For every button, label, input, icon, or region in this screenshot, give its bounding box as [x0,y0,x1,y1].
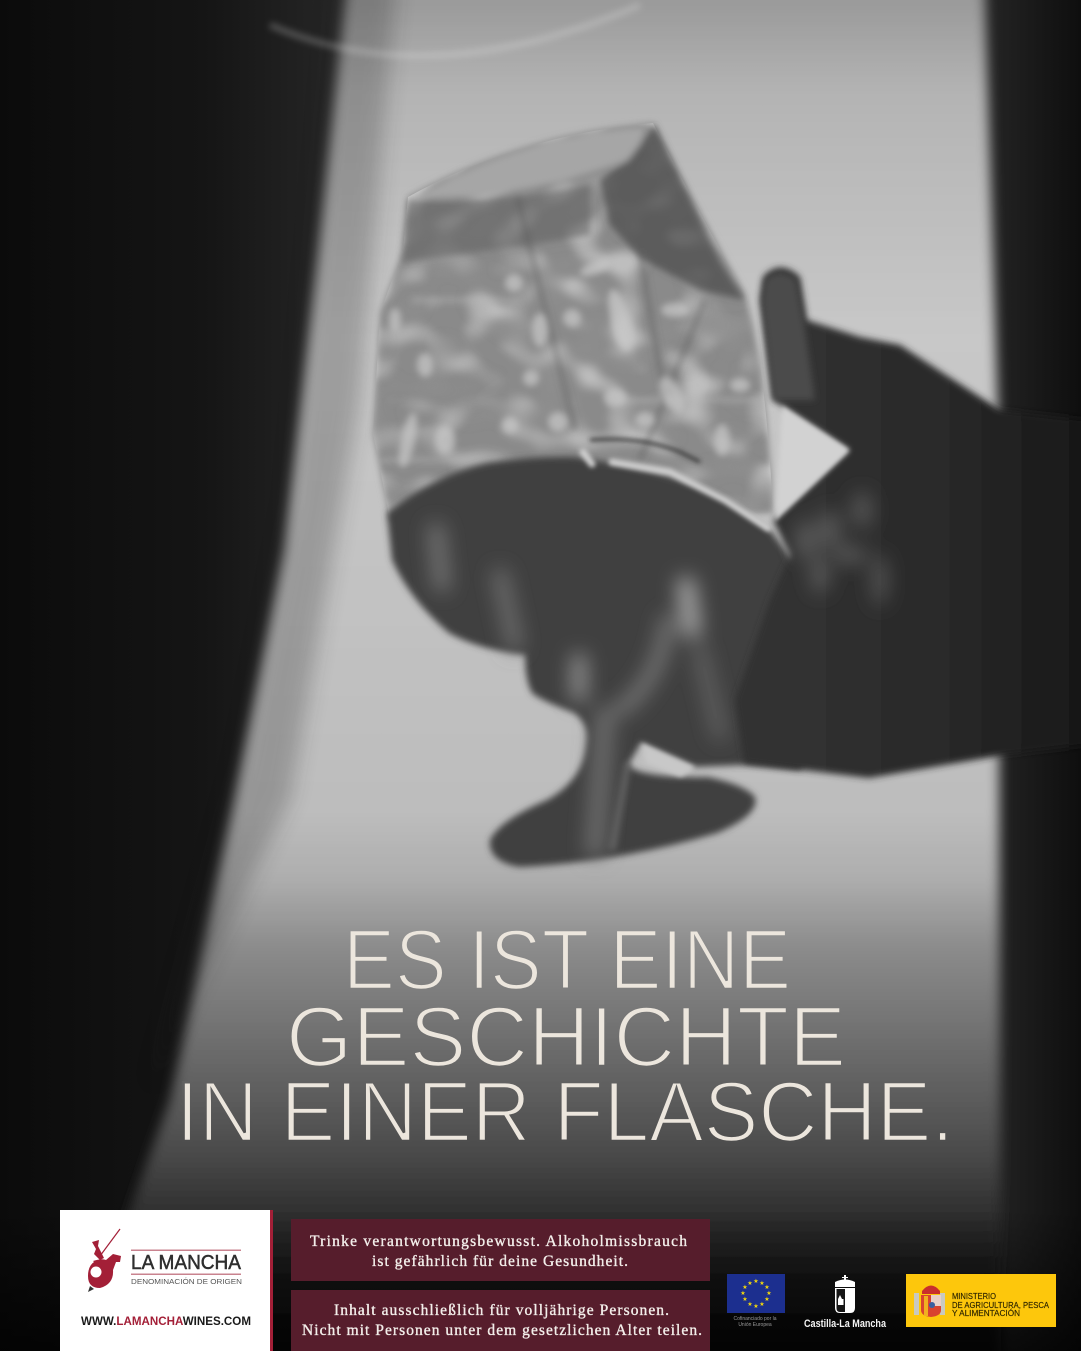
logo: European Union: ★ [747,1280,753,1287]
logo: European Union: ★ [753,1303,759,1310]
rim band [415,127,645,198]
wine glass shadow [370,120,804,872]
mottled shadow of fingers [797,492,886,606]
bottom floor shade [0,1210,1081,1351]
logo: European Union: ★ [764,1296,770,1303]
logo: European Union: ★ [740,1290,746,1297]
logo: Castilla-La Mancha: Castilla-La Mancha [804,1318,887,1330]
warning box 1: ist gefährlich für deine Gesundheit. [372,1253,628,1270]
logo: Ministerio: DE AGRICULTURA, PESCA [952,1301,1050,1310]
icon: Don Quixote rider [88,1229,121,1292]
wine and stem [387,439,840,867]
glass bowl with cut-crystal texture [370,120,775,517]
wine light streaks [436,530,720,850]
title [176,913,954,1160]
logo: European Union: ★ [764,1284,770,1291]
website: WWW.LAMANCHAWINES.COM [81,1316,251,1328]
logo: European Union: Cofinanciado por la [733,1316,777,1322]
logo: European Union: ★ [742,1296,748,1303]
logo: European Union [727,1274,785,1328]
warning box 2: Nicht mit Personen unter dem gesetzlichen Alter teilen. [302,1322,702,1339]
logo: European Union: ★ [742,1284,748,1291]
logo: European Union: ★ [753,1278,759,1285]
warning box 1: Trinke verantwortungsbewusst. Alkoholmissbrauch [310,1233,687,1250]
logo: Ministerio: MINISTERIO [952,1292,996,1301]
logo: European Union: ★ [766,1290,772,1297]
logo: Castilla-La Mancha [804,1275,887,1330]
wordmark: LA MANCHA [131,1252,242,1274]
light triangle between fingers [775,406,850,521]
wordmark: DENOMINACIÓN DE ORIGEN [131,1277,242,1286]
logo: European Union: ★ [747,1301,753,1308]
hand shadow holding the glass [735,268,1081,778]
title: ES IST EINE [343,913,791,1008]
logo: European Union: Unión Europea [738,1322,772,1328]
finger [762,273,815,400]
light sliver under the bowl [641,743,695,777]
logo: Ministerio [906,1274,1056,1327]
title: IN EINER FLASCHE. [176,1065,954,1160]
warning box 2: Inhalt ausschließlich für volljährige Personen. [334,1302,669,1319]
warning box 2 [291,1290,710,1351]
logo panel: La Mancha [60,1210,273,1351]
warning box 1 [291,1219,710,1281]
logo: European Union: ★ [759,1301,765,1308]
wordmark [131,1250,242,1286]
icon: Spanish coat of arms [914,1286,945,1317]
shine along wine surface [583,452,768,528]
title: GESCHICHTE [286,990,846,1085]
logo: European Union: ★ [759,1280,765,1287]
logo: Ministerio: Y ALIMENTACIÓN [952,1308,1020,1318]
